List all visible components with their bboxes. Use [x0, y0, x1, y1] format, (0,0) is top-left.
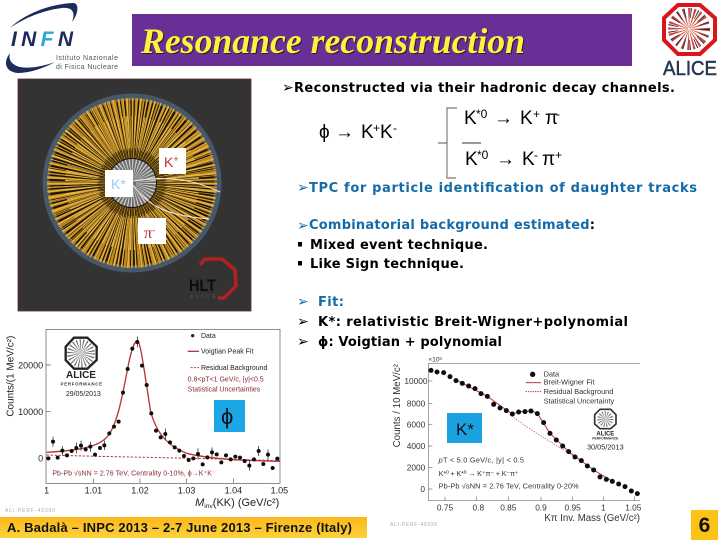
mini ALICE logo: 29/05/2013: [66, 391, 101, 398]
particle tracks: [72, 123, 192, 243]
equation: K*0 decay: *0: [476, 107, 488, 121]
list: fit: Fit:: [318, 295, 344, 310]
footer bar: [0, 517, 367, 538]
logo: HLT: HLT: [189, 276, 217, 295]
label: pi-: -: [152, 225, 155, 235]
label: K+: [159, 148, 186, 174]
label box: K*: K*: [456, 420, 474, 439]
axis labels: 10000: [18, 407, 43, 417]
equation: anti-K*0 decay: [462, 143, 562, 170]
equation: phi decay: K: [361, 122, 374, 143]
equation: anti-K*0 decay: K: [465, 149, 478, 170]
equation: phi decay: →: [335, 122, 354, 143]
axis labels: 1.05: [625, 502, 642, 512]
chart: phi invariant mass: (KK) (GeV/c²): [213, 497, 279, 509]
decay tracks: [133, 179, 220, 219]
mini ALICE logo: ALICE: [66, 370, 96, 381]
mini ALICE logo: [61, 338, 102, 398]
annotation: [438, 456, 579, 491]
axis labels: 1: [44, 486, 49, 496]
footer bar: A. Badalà – INPC 2013 – 2-7 June 2013 – Firenze (Italy): [7, 520, 352, 535]
axis labels: 1.01: [85, 486, 102, 496]
chart: phi invariant mass: inv: [204, 503, 213, 510]
equation: K*0 decay: -: [556, 107, 560, 121]
logo: ALICE: ALICE: [663, 58, 717, 80]
label box: phi: [214, 400, 245, 432]
axis labels: 1.05: [271, 486, 288, 496]
equation: K*0 decay: [464, 107, 560, 129]
detector ring: [46, 97, 218, 269]
annotation: pT < 5.0 GeV/c, |y| < 0.5: [438, 456, 524, 465]
equation: anti-K*0 decay: -: [534, 148, 538, 162]
logo: ALICE: [663, 5, 717, 80]
list: fit: ϕ: Voigtian + polynomial: [318, 335, 502, 350]
list: fit: [297, 294, 628, 350]
legend: Pb-Pb √sNN = 2.76 TeV, Centrality 0-10%, ϕ→K⁺K⁻: [52, 469, 216, 477]
list: fit: ➢: [297, 314, 309, 330]
axis labels: 2000: [407, 462, 426, 472]
list: fit: ➢: [297, 334, 309, 350]
logo: INFN: Istituto Nazionale: [56, 55, 118, 62]
equation: K*0 decay: K: [464, 108, 477, 129]
legend: Residual Background: [544, 387, 613, 396]
legend: Statistical Uncertainties: [188, 387, 261, 394]
bullet: combinatorial background: ➢: [297, 218, 309, 234]
chart: K* invariant mass: [392, 356, 642, 524]
annotation: Pb-Pb √sNN = 2.76 TeV, Centrality 0-20%: [439, 482, 579, 491]
logo: INFN: [6, 3, 118, 73]
equation: K*0 decay: +: [533, 107, 540, 121]
page number: 6: [699, 514, 710, 537]
equation: anti-K*0 decay: K: [522, 149, 535, 170]
chart: K* invariant mass: Counts / 10 MeV/c²: [392, 363, 403, 447]
axis labels: 8000: [407, 398, 426, 408]
data points: [46, 337, 279, 471]
bullet: TPC: ➢: [297, 180, 309, 196]
equation: K*0 decay: →: [494, 108, 513, 129]
mini ALICE logo: PERFORMANCE: [61, 382, 102, 387]
bullet: reconstruction channels: Reconstructed via their hadronic decay channels.: [294, 81, 675, 96]
equation: phi decay: [319, 121, 397, 143]
axis labels: ×10³: [428, 356, 443, 363]
axis labels: 6000: [407, 420, 426, 430]
axis labels: 20000: [18, 361, 43, 371]
axis labels: 0.85: [500, 502, 517, 512]
legend: Statistical Uncertainty: [544, 397, 614, 406]
legend: Data: [544, 370, 560, 379]
chart: phi invariant mass: M: [195, 497, 205, 509]
title banner: [132, 14, 632, 66]
equation: anti-K*0 decay: *0: [477, 148, 489, 162]
axis labels: 0.75: [437, 502, 453, 512]
label: K*: K*: [111, 176, 126, 192]
axis labels: 1.02: [131, 486, 149, 496]
mini ALICE logo: [587, 409, 624, 451]
mini ALICE logo: ALICE: [596, 431, 614, 437]
axis labels: 4000: [407, 441, 426, 451]
bullet: combinatorial background: Combinatorial background estimated:: [309, 218, 595, 233]
equation: phi decay: ϕ: [319, 122, 330, 143]
legend: Breit-Wigner Fit: [544, 378, 595, 387]
logo: INFN: di Fisica Nucleare: [56, 64, 118, 71]
mini ALICE logo: 30/05/2013: [587, 442, 624, 451]
figure id: K*: ALI-PERF-49336: [390, 522, 437, 528]
legend: [52, 333, 268, 477]
mini ALICE logo: PERFORMANCE: [592, 437, 619, 441]
bullet: TPC: TPC for particle identification of daughter tracks: [309, 181, 697, 196]
axis labels: [18, 361, 288, 496]
list: background techniques: Mixed event technique.: [310, 238, 488, 253]
axis labels: 0: [38, 453, 43, 463]
chart: phi invariant mass: [5, 329, 288, 510]
equation: anti-K*0 decay: +: [555, 148, 562, 162]
title banner: Resonance reconstruction: [140, 21, 525, 61]
list: fit: ➢: [297, 294, 309, 310]
logo: HLT: ALICE: [190, 294, 217, 300]
logo: INFN: INFN: [11, 28, 74, 51]
fit curve: [456, 380, 612, 481]
chart: phi invariant mass: Counts/(1 MeV/c²): [5, 336, 16, 417]
equation: phi decay: -: [393, 121, 397, 135]
axis labels: 1.03: [178, 486, 195, 496]
data points: [428, 368, 640, 496]
equation: phi decay: +: [373, 121, 380, 135]
residual background: [47, 455, 280, 461]
axis labels: 0: [420, 484, 425, 494]
axis labels: [404, 356, 642, 512]
bullet: reconstruction channels: ➢: [282, 80, 294, 96]
chart: K* invariant mass: Kπ Inv. Mass (GeV/c²): [544, 513, 640, 524]
legend: [526, 370, 614, 406]
axis labels: 1: [601, 502, 606, 512]
panel: event display: [18, 79, 251, 311]
axis labels: 0.8: [473, 502, 484, 512]
logo: HLT: [189, 259, 236, 300]
equation: phi decay: K: [380, 122, 393, 143]
label: K*: [105, 170, 133, 197]
figure id: phi: ALI-PERF-49300: [5, 508, 55, 514]
label box: K*: [447, 413, 482, 443]
axis labels: 1.04: [225, 486, 242, 496]
label: pi-: π: [144, 225, 152, 242]
axis labels: 0.9: [535, 502, 547, 512]
equation: anti-K*0 decay: →: [496, 149, 515, 170]
title banner: Resonance reconstruction: [141, 22, 526, 62]
equation: anti-K*0 decay: π: [542, 149, 555, 170]
label box: phi: ϕ: [221, 404, 233, 429]
brace: [438, 108, 457, 178]
page number: [691, 510, 718, 540]
legend: Residual Background: [201, 365, 268, 372]
list: background techniques: Like Sign technique.: [310, 257, 464, 272]
label: K+: +: [173, 154, 179, 164]
residual background: [512, 416, 580, 460]
annotation: K*⁰ + K*⁰ → K⁺π⁻ + K⁻π⁺: [439, 469, 519, 478]
label: pi-: [138, 218, 166, 244]
legend: Data: [201, 333, 216, 340]
equation: K*0 decay: π: [545, 108, 558, 129]
legend: 0.8<pT<1 GeV/c, |y|<0.5: [188, 376, 264, 383]
equation: K*0 decay: K: [520, 108, 533, 129]
inner tracker: [108, 159, 156, 207]
axis labels: 10000: [404, 376, 428, 386]
label: K+: K: [164, 154, 173, 170]
fit curve: [47, 341, 280, 461]
legend: Voigtian Peak Fit: [201, 348, 253, 355]
list: fit: K*: relativistic Breit-Wigner+polynomial: [318, 315, 628, 330]
axis labels: 0.95: [565, 502, 581, 512]
list: background techniques: [298, 238, 488, 272]
